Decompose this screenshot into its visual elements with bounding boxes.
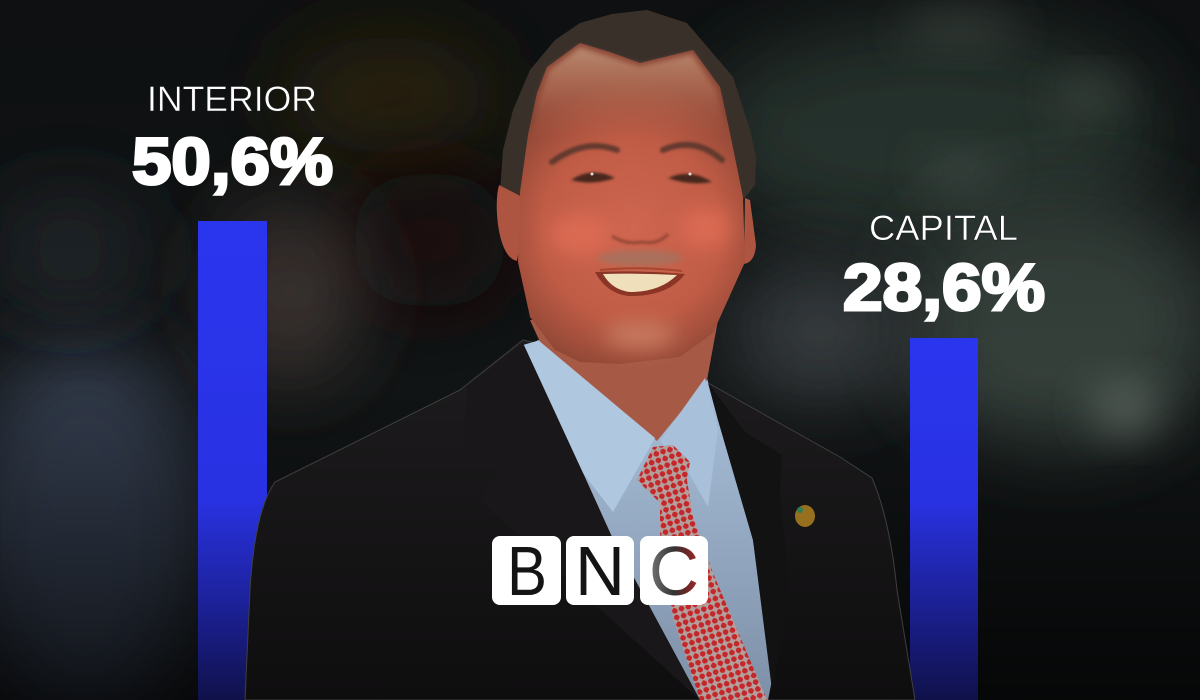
eyebrows bbox=[552, 145, 722, 162]
lapel pin bbox=[795, 505, 815, 527]
logo tile: C: C bbox=[649, 532, 699, 610]
shirt collar: left bbox=[523, 340, 655, 512]
face bbox=[518, 43, 745, 364]
hair bbox=[500, 10, 756, 220]
lapel: left bbox=[463, 343, 700, 700]
nose bbox=[612, 234, 668, 243]
logo tile: N: N bbox=[575, 532, 625, 610]
logo tile: B bbox=[492, 532, 561, 610]
shirt bbox=[523, 340, 772, 700]
eyes bbox=[571, 172, 712, 183]
suit jacket bbox=[245, 340, 915, 700]
lapel: right bbox=[708, 383, 790, 690]
logo tile: B: B bbox=[507, 532, 547, 610]
neck bbox=[530, 320, 718, 441]
moustache shadow bbox=[598, 250, 682, 266]
cheek highlights bbox=[550, 208, 729, 347]
smile bbox=[595, 268, 685, 296]
bar: capital bbox=[910, 338, 978, 700]
portrait of man in suit bbox=[245, 10, 915, 700]
label: interior: INTERIOR bbox=[147, 80, 317, 119]
label: capital: CAPITAL bbox=[869, 209, 1018, 248]
ears bbox=[497, 185, 756, 264]
value: capital 28,6%: 28,6% bbox=[843, 250, 1045, 324]
forehead highlight bbox=[532, 47, 727, 140]
value: interior 50,6%: 50,6% bbox=[132, 124, 333, 198]
BNC logo bbox=[492, 532, 708, 610]
shirt collar: right bbox=[660, 378, 718, 507]
bar: interior bbox=[198, 221, 267, 700]
tie bbox=[637, 445, 767, 700]
